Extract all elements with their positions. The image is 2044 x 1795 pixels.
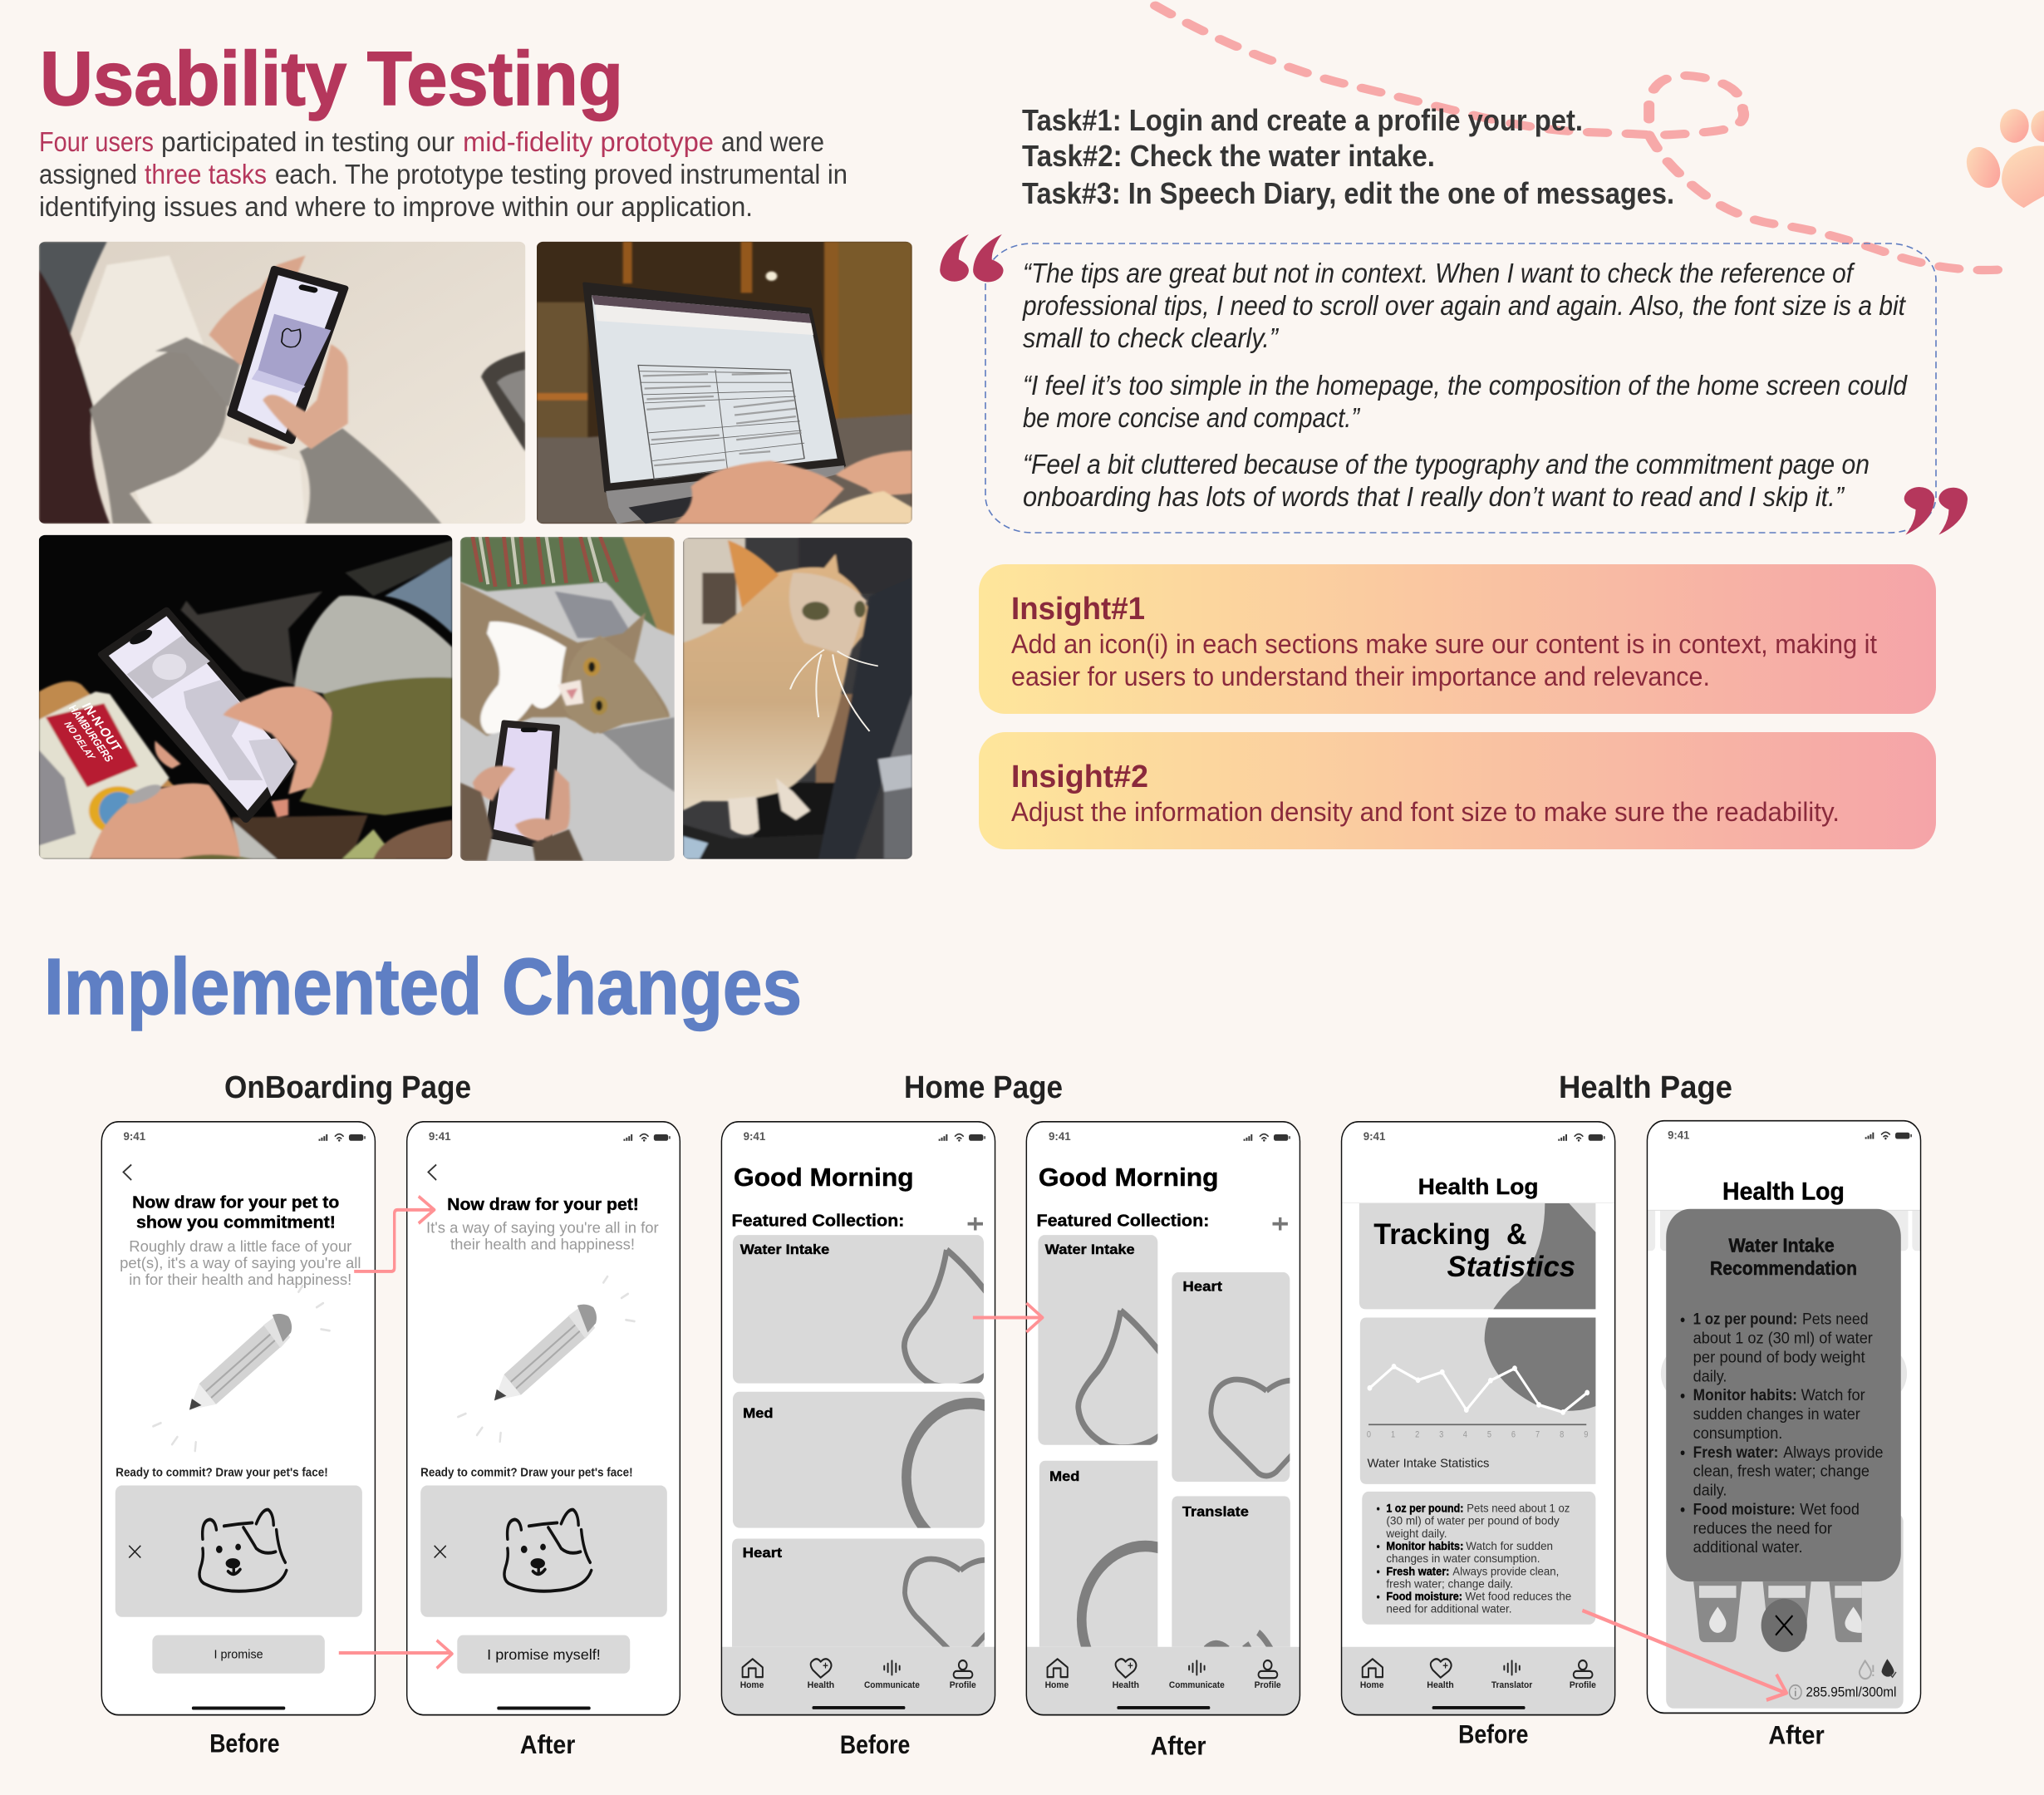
- phone: home before: Health: [808, 1681, 834, 1690]
- quote text: small to check clearly.”: [1023, 322, 1280, 353]
- photo: user holding phone at white table: [39, 242, 525, 524]
- phone: onboarding before: Ready to commit? Draw your pet's face!: [115, 1465, 328, 1479]
- phone: home after: Home: [1045, 1681, 1069, 1690]
- heading: Implemented Changes: Implemented Changes: [44, 942, 802, 1031]
- arrow: tips moved to info: [1582, 1611, 1786, 1700]
- modal: water intake recommendation: daily.: [1693, 1366, 1727, 1385]
- label: before: Before: [1458, 1719, 1528, 1749]
- phone: onboarding before: I promise: [214, 1648, 263, 1661]
- modal: water intake recommendation: Always provide: [1783, 1443, 1883, 1461]
- card: tracking and statistics banner: Statistics: [1447, 1251, 1575, 1283]
- phone: onboarding after: Now draw for your pet!: [447, 1195, 639, 1213]
- panel: insight 1: Add an icon(i) in each sections make sure our content is in context, making it: [1011, 629, 1877, 659]
- modal: water intake recommendation: 1 oz per pound:: [1693, 1309, 1797, 1328]
- phone: home after: Water Intake: [1045, 1242, 1135, 1257]
- intro paragraph: assigned: [39, 159, 137, 189]
- phone: home before: Profile: [950, 1681, 976, 1690]
- modal: water intake recommendation: Fresh water:: [1693, 1443, 1778, 1461]
- phone: health before: Home: [1360, 1681, 1384, 1690]
- phone: health before: Profile: [1570, 1681, 1596, 1690]
- card: water tips: Wet food reduces the: [1465, 1590, 1571, 1603]
- decorative dashed pet trail: [1156, 6, 2013, 270]
- photo: laptop with document: [537, 242, 912, 524]
- section heading: Home Page: Home Page: [904, 1070, 1063, 1105]
- phone: home before: Home: [740, 1681, 764, 1690]
- quote text: professional tips, I need to scroll over again and again. Also, the font size is a bit: [1022, 290, 1907, 321]
- line chart: water intake statistics: 9: [1584, 1430, 1589, 1440]
- intro paragraph: identifying issues and where to improve within our application.: [39, 191, 753, 222]
- photo collage: [39, 242, 912, 861]
- card: water tips: 1 oz per pound:: [1386, 1502, 1463, 1515]
- line chart: water intake statistics: 1: [1391, 1430, 1396, 1440]
- phone: home after: Med: [1049, 1469, 1079, 1484]
- phone: onboarding before: 9:41: [123, 1130, 145, 1143]
- phone: health after: [1647, 1121, 1921, 1713]
- phone: onboarding before: show you commitment!: [136, 1213, 336, 1232]
- photo: tabby kitten with phone: [460, 537, 675, 861]
- phone: health before: Translator: [1491, 1681, 1532, 1690]
- card: water tips: Pets need about 1 oz: [1467, 1502, 1570, 1515]
- line chart: water intake statistics: 2: [1415, 1430, 1420, 1440]
- line chart: water intake statistics: 6: [1511, 1430, 1516, 1440]
- modal: water intake recommendation: daily.: [1693, 1480, 1727, 1499]
- modal: water intake recommendation: per pound of body weight: [1693, 1347, 1865, 1366]
- panel: insight 1: easier for users to understand their importance and relevance.: [1011, 661, 1710, 691]
- photo: cream cat by chair: [683, 538, 912, 859]
- modal: water intake recommendation: consumption.: [1693, 1424, 1782, 1442]
- quote text: be more concise and compact.”: [1023, 402, 1361, 433]
- phone: onboarding after: [407, 1122, 680, 1715]
- home page comparison: [721, 1122, 1302, 1761]
- phone: home before: Good Morning: [734, 1163, 914, 1192]
- task list: [1022, 103, 1674, 210]
- phone: home after: Communicate: [1169, 1681, 1225, 1690]
- intro paragraph: and were: [721, 126, 824, 157]
- phone: onboarding before: in for their health and happiness!: [129, 1271, 351, 1288]
- phone: health before: Health Log: [1418, 1174, 1539, 1199]
- phone: onboarding before: Now draw for your pet to: [132, 1193, 339, 1212]
- modal: water intake recommendation: Monitor habits:: [1693, 1385, 1797, 1404]
- phone: home after: Featured Collection:: [1036, 1211, 1209, 1231]
- phone: onboarding after: 9:41: [429, 1130, 451, 1143]
- panel: insight 1: [979, 564, 1936, 714]
- card: water tips: Watch for sudden: [1466, 1539, 1553, 1552]
- onboarding comparison: [101, 1122, 680, 1760]
- arrow: layout change: [973, 1303, 1043, 1332]
- card: water tips: changes in water consumption.: [1386, 1552, 1540, 1565]
- icon: opening quote mark: [940, 234, 1004, 282]
- label: before: Before: [209, 1729, 280, 1758]
- icon: water status drops: [1860, 1659, 1896, 1679]
- card: tracking and statistics banner: Tracking &: [1373, 1218, 1527, 1250]
- task list: Task#3: In Speech Diary, edit the one of messages.: [1022, 176, 1674, 210]
- phone: home before: Water Intake: [740, 1242, 830, 1257]
- phone: home before: Communicate: [864, 1681, 920, 1690]
- arrow: button copy change: [339, 1640, 452, 1669]
- modal: water intake recommendation: clean, fresh water; change: [1693, 1461, 1870, 1480]
- phone: onboarding after: I promise myself!: [487, 1646, 601, 1663]
- phone: onboarding after: It's a way of saying you're all in for: [426, 1218, 659, 1237]
- card: water tips: Food moisture:: [1386, 1590, 1462, 1603]
- health page comparison: [1342, 1121, 1921, 1750]
- line chart: water intake statistics: 3: [1439, 1430, 1444, 1440]
- phone: home after: Good Morning: [1039, 1163, 1219, 1192]
- quote text: “I feel it’s too simple in the homepage, the composition of the home screen could: [1023, 370, 1908, 401]
- panel: insight 1: Insight#1: [1011, 592, 1145, 627]
- modal: water intake recommendation: Recommendation: [1710, 1256, 1857, 1279]
- phone: health before: Health: [1427, 1681, 1454, 1690]
- label: after: After: [1151, 1732, 1206, 1761]
- section heading: Health Page: Health Page: [1559, 1070, 1732, 1105]
- phone: home after: Health: [1113, 1681, 1139, 1690]
- label: before: Before: [840, 1730, 910, 1760]
- icon: paw print: [1961, 109, 2044, 208]
- phone: onboarding after: their health and happiness!: [450, 1235, 635, 1253]
- card: water tips: (30 ml) of water per pound of body: [1386, 1514, 1560, 1527]
- card: water tips: Fresh water:: [1386, 1564, 1449, 1577]
- phone: health after: Health Log: [1722, 1178, 1845, 1205]
- sticker text: IN-N-OUT: [78, 701, 125, 754]
- card: water tips: need for additional water.: [1386, 1602, 1512, 1616]
- modal: water intake recommendation: Wet food: [1800, 1499, 1860, 1518]
- phone: home before: Med: [743, 1406, 773, 1421]
- task list: Task#1: Login and create a profile your pet.: [1022, 103, 1583, 137]
- intro paragraph: mid-fidelity prototype: [463, 126, 714, 157]
- modal: water intake recommendation: Watch for: [1801, 1385, 1865, 1404]
- phone: onboarding before: pet(s), it's a way of saying you're all: [120, 1254, 361, 1271]
- phone: home after: 9:41: [1049, 1130, 1071, 1143]
- phone: home before: Featured Collection:: [732, 1211, 904, 1231]
- line chart: water intake statistics: Water Intake Statistics: [1368, 1457, 1490, 1470]
- intro paragraph: three tasks: [145, 159, 267, 189]
- modal: water intake recommendation: about 1 oz (30 ml) of water: [1693, 1328, 1873, 1347]
- line chart: water intake statistics: 5: [1487, 1430, 1491, 1440]
- modal: water intake recommendation: Food moisture:: [1693, 1499, 1796, 1518]
- phone: health before: [1342, 1122, 1615, 1715]
- line chart: water intake statistics: 4: [1463, 1430, 1467, 1440]
- card: water tips: fresh water; change daily.: [1386, 1577, 1513, 1591]
- label: after: After: [1768, 1721, 1825, 1750]
- title: Usability Testing: Usability Testing: [40, 37, 623, 121]
- quote text: onboarding has lots of words that I really don’t want to read and I skip it.”: [1023, 481, 1845, 512]
- task list: Task#2: Check the water intake.: [1022, 139, 1435, 173]
- label: after: After: [520, 1730, 575, 1760]
- panel: insight 2: Adjust the information density and font size to make sure the readability.: [1011, 797, 1840, 827]
- line chart: water intake statistics: [1360, 1317, 1595, 1484]
- panel: insight 2: [979, 732, 1936, 849]
- phone: home before: Heart: [743, 1546, 783, 1561]
- phone: health before: 9:41: [1363, 1130, 1385, 1143]
- sticker text: NO DELAY: [61, 720, 97, 762]
- icon: closing quote mark: [1904, 487, 1968, 535]
- icon: close button: [1761, 1599, 1807, 1652]
- modal: water intake recommendation: sudden changes in water: [1693, 1404, 1860, 1423]
- phone: home after: Profile: [1255, 1681, 1281, 1690]
- arrow: shortened description: [354, 1197, 435, 1271]
- phone: onboarding before: [101, 1122, 375, 1715]
- line chart: water intake statistics: 8: [1560, 1430, 1565, 1440]
- card: tracking and statistics banner: [1359, 1203, 1595, 1309]
- section heading: OnBoarding Page: OnBoarding Page: [224, 1070, 471, 1105]
- photo: phone with Pet Page over sticker laptop: [39, 535, 452, 859]
- quote text: [1022, 258, 1908, 512]
- intro paragraph: [39, 126, 848, 222]
- card: water tips: weight daily.: [1385, 1527, 1447, 1540]
- water reading: 285.95ml/300ml: [1806, 1685, 1896, 1700]
- line chart: water intake statistics: 7: [1535, 1430, 1540, 1440]
- modal: water intake recommendation: [1666, 1209, 1901, 1581]
- phone: home before: [721, 1121, 995, 1715]
- line chart: water intake statistics: 0: [1367, 1430, 1371, 1440]
- phone: home after: Heart: [1182, 1280, 1223, 1295]
- modal: water intake recommendation: Pets need: [1802, 1309, 1869, 1328]
- phone: home after: [1026, 1122, 1302, 1715]
- panel: user quotes: [985, 243, 1936, 533]
- modal: water intake recommendation: Water Intake: [1728, 1234, 1835, 1256]
- sticker text: HAMBURGERS: [66, 703, 115, 764]
- phone: home after: Translate: [1182, 1505, 1249, 1520]
- card: water tips: [1362, 1492, 1595, 1625]
- card: water tips: Always provide clean,: [1452, 1564, 1559, 1577]
- intro paragraph: each. The prototype testing proved instrumental in: [275, 159, 848, 189]
- phone: onboarding before: Roughly draw a little face of your: [129, 1237, 352, 1255]
- intro paragraph: Four users: [39, 126, 154, 157]
- modal: water intake recommendation: additional water.: [1693, 1537, 1803, 1556]
- card: water tips: Monitor habits:: [1386, 1539, 1463, 1552]
- modal: water intake recommendation: reduces the need for: [1693, 1518, 1832, 1537]
- intro paragraph: participated in testing our: [161, 126, 454, 157]
- quote text: “The tips are great but not in context. When I want to check the reference of: [1023, 258, 1855, 288]
- phone: onboarding after: Ready to commit? Draw your pet's face!: [420, 1465, 633, 1479]
- quote text: “Feel a bit cluttered because of the typography and the commitment page on: [1023, 449, 1870, 479]
- phone: health after: 9:41: [1668, 1129, 1689, 1142]
- phone: home before: 9:41: [744, 1130, 765, 1143]
- panel: insight 2: Insight#2: [1011, 760, 1148, 794]
